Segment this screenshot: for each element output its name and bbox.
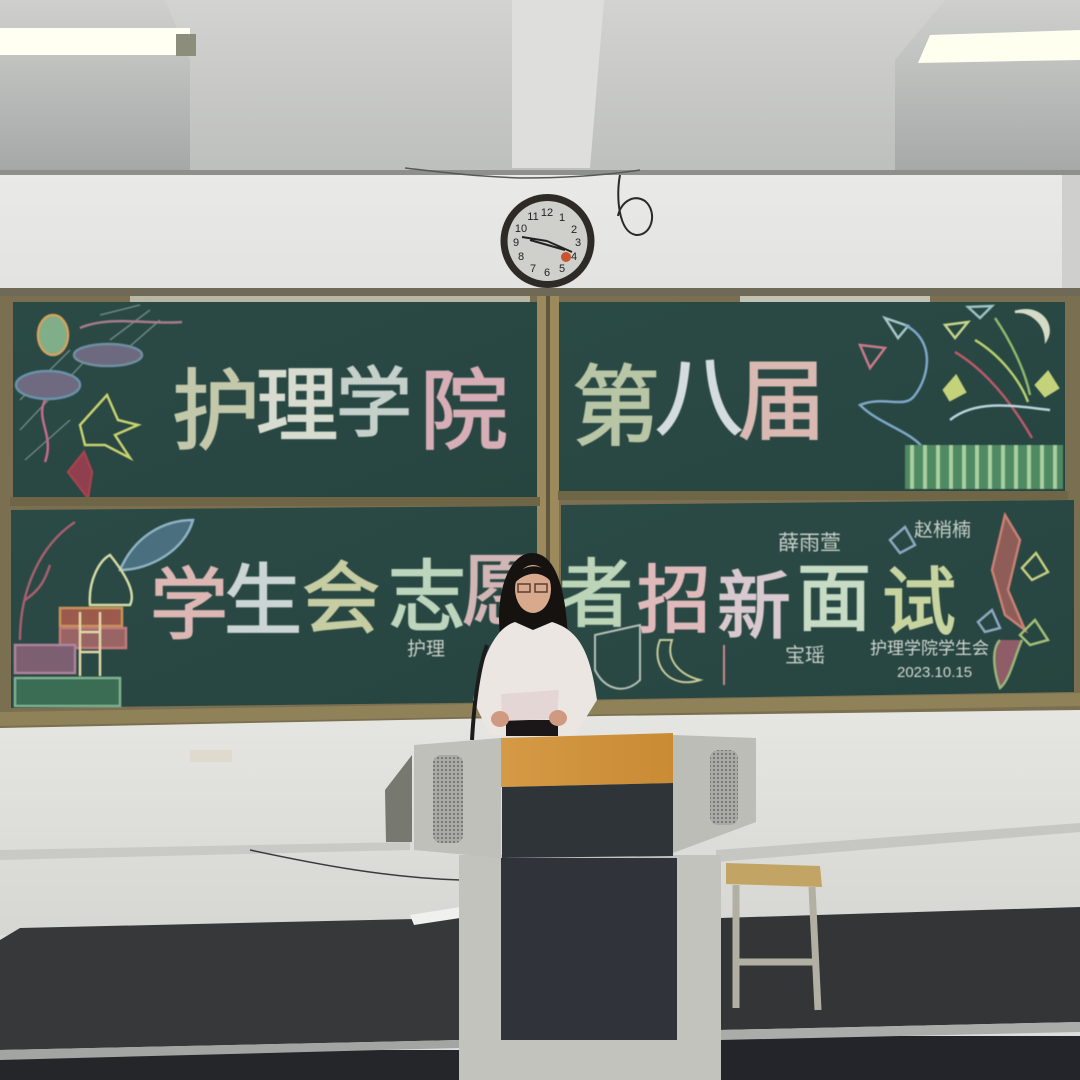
blackboard panel: top right bbox=[559, 302, 1065, 494]
bracket behind lectern bbox=[385, 755, 412, 842]
speaker grilles bbox=[433, 755, 463, 843]
wall clock: 4 bbox=[571, 251, 577, 263]
heading: recruitment interview: 招 bbox=[637, 559, 711, 642]
heading: recruitment interview: 新 bbox=[717, 565, 791, 648]
microphone bbox=[472, 645, 487, 740]
wall clock: 11 bbox=[527, 211, 539, 223]
heading: eighth session: 第 bbox=[572, 358, 660, 457]
ceiling bbox=[0, 0, 1080, 175]
speaker bbox=[473, 553, 597, 736]
heading: nursing school: 学 bbox=[336, 362, 412, 447]
heading: recruitment interview: 试 bbox=[882, 561, 956, 644]
heading: student union volunteers: 愿 bbox=[462, 547, 540, 635]
lectern base bbox=[459, 855, 721, 1080]
heading: student union volunteers: 志 bbox=[388, 553, 466, 641]
hands bbox=[491, 711, 509, 727]
wall clock: 6 bbox=[544, 267, 550, 279]
chalk drawing: planes, stars and grass bbox=[860, 306, 1063, 489]
wall clock: 3 bbox=[575, 237, 581, 249]
board chalk tray bbox=[0, 693, 1080, 726]
chalk drawing: balloon and clouds bbox=[16, 305, 182, 498]
wall clock: 1 bbox=[559, 212, 565, 224]
blackboard panel: bottom right: 2023.10.15 bbox=[897, 664, 972, 681]
heading: nursing school: 院 bbox=[420, 362, 508, 461]
upper wall bbox=[0, 168, 1080, 300]
heading: eighth session: 八 bbox=[655, 348, 743, 447]
face bbox=[515, 565, 551, 613]
wall clock: 5 bbox=[559, 263, 565, 275]
lectern bbox=[414, 733, 756, 1080]
chalk drawing: cat and moon bbox=[595, 625, 724, 689]
wall clock: 10 bbox=[515, 223, 527, 235]
ceiling light right bbox=[918, 30, 1080, 63]
heading: eighth session: 届 bbox=[738, 352, 826, 451]
floor platform bbox=[0, 907, 1080, 1080]
blackboard panel: bottom right: 宝瑶 bbox=[785, 644, 825, 667]
organizer and date: 护理学院学生会 bbox=[870, 639, 989, 658]
wall clock: 8 bbox=[518, 251, 524, 263]
paper bbox=[501, 690, 559, 721]
lectern dark lower panel bbox=[501, 858, 677, 1040]
wall rail and cables bbox=[0, 823, 1080, 880]
lectern dark upper panel bbox=[502, 783, 673, 858]
heading: nursing school: 护 bbox=[172, 362, 260, 461]
blackboard frame bbox=[0, 288, 1080, 728]
lectern wood top bbox=[501, 733, 673, 787]
chalk drawing: rocket and stars bbox=[890, 515, 1048, 688]
blackboard panel: top left bbox=[13, 302, 537, 498]
ceiling light left bbox=[0, 28, 196, 56]
signature: 护理 bbox=[407, 638, 445, 660]
white blouse bbox=[473, 622, 597, 735]
heading: recruitment interview: 者 bbox=[559, 553, 633, 636]
heading: student union volunteers: 会 bbox=[302, 555, 380, 643]
lectern left wing bbox=[414, 738, 501, 858]
blackboard panel: bottom left bbox=[11, 506, 540, 708]
heading: student union volunteers: 学 bbox=[150, 561, 228, 649]
heading: nursing school: 理 bbox=[256, 361, 338, 452]
heading: student union volunteers: 生 bbox=[224, 557, 302, 645]
wall clock: 2 bbox=[571, 224, 577, 236]
lower wall bbox=[0, 700, 1080, 935]
wall clock: 12 bbox=[541, 207, 553, 219]
heading: recruitment interview: 面 bbox=[797, 557, 871, 640]
wall clock bbox=[500, 194, 594, 288]
lectern right wing bbox=[673, 735, 756, 853]
glasses bbox=[518, 584, 547, 592]
wall clock: 9 bbox=[513, 237, 519, 249]
board middle rail bbox=[10, 491, 1068, 506]
chalk drawing: plant and books bbox=[15, 520, 193, 706]
hair bbox=[499, 553, 568, 645]
wall clock: 7 bbox=[530, 263, 536, 275]
signature names: 薛雨萱 bbox=[778, 532, 841, 555]
blackboard panel: bottom right: 赵梢楠 bbox=[914, 519, 971, 541]
fringe bbox=[513, 566, 553, 585]
stool bbox=[726, 863, 822, 1010]
blackboard panel: bottom right bbox=[559, 500, 1074, 700]
dark skirt bbox=[506, 720, 558, 736]
wire loop bbox=[618, 175, 652, 235]
board center divider bbox=[537, 296, 559, 706]
